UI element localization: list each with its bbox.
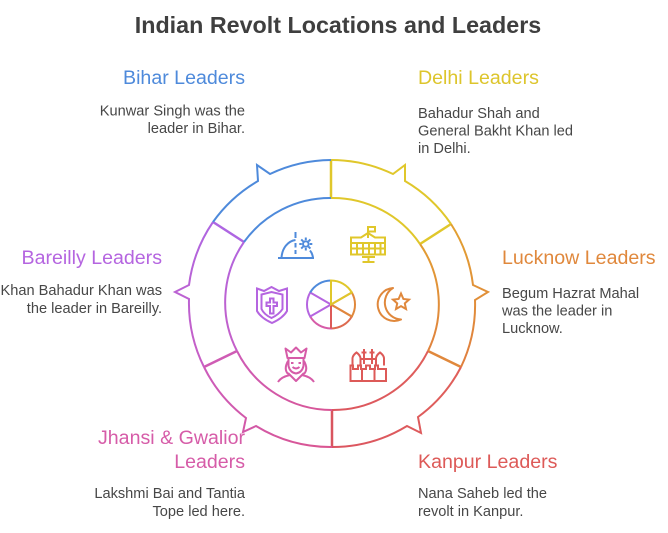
heading: Bihar Leaders: Bihar Leaders [123,67,245,89]
text: Delhi description: General Bakht Khan led [418,124,573,140]
text: Delhi description: Bahadur Shah and [418,106,540,122]
panel: Jhansi & Gwalior Leaders [94,427,246,520]
text: Bihar description: Kunwar Singh was the [100,104,245,120]
panel: Lucknow Leaders [501,247,656,337]
text: Kanpur description: Nana Saheb led the [418,486,547,502]
text: Bihar description: leader in Bihar. [148,121,245,137]
icon: palace [351,227,385,262]
panel: Kanpur Leaders [418,451,558,520]
ring segment: Kanpur [332,351,461,447]
text: Kanpur description: revolt in Kanpur. [418,504,523,520]
icon: dome and sun [278,232,314,258]
icon: fort [350,349,386,381]
icon: crescent and star [378,288,409,321]
text: Lucknow description: was the leader in [501,304,612,320]
heading: Bareilly Leaders: Bareilly Leaders [22,247,162,269]
heading: Kanpur Leaders: Kanpur Leaders [418,451,558,473]
heading: Jhansi & Gwalior Leaders: Leaders [174,451,245,473]
text: Bareilly description: Khan Bahadur Khan was [1,283,162,299]
panel: Bihar Leaders [100,67,245,137]
text: Bareilly description: the leader in Bareilly. [27,301,162,317]
text: Jhansi description: Lakshmi Bai and Tantia [94,486,246,502]
ring segment: Jhansi [204,351,332,447]
ring segment: Bareilly [175,222,244,367]
panel: Delhi Leaders [418,67,573,157]
title: Indian Revolt Locations and Leaders [135,12,541,38]
text: Lucknow description: Lucknow. [502,321,563,337]
ring segment: Bihar [213,160,331,242]
icon: shield with cross [257,287,287,323]
ring segment: Delhi [331,160,451,244]
heading: Lucknow Leaders: Lucknow Leaders [502,247,656,269]
center pie [307,280,355,328]
heading: Delhi Leaders: Delhi Leaders [418,67,539,89]
text: Jhansi description: Tope led here. [152,504,245,520]
ring diagram [175,160,488,447]
icon: queen with crown [278,348,314,382]
text: Lucknow description: Begum Hazrat Mahal [502,286,639,302]
heading: Jhansi & Gwalior Leaders: Jhansi & Gwalior [98,427,245,449]
panel: Bareilly Leaders [1,247,162,317]
ring segment: Lucknow [420,224,488,367]
text: Delhi description: in Delhi. [418,141,471,157]
